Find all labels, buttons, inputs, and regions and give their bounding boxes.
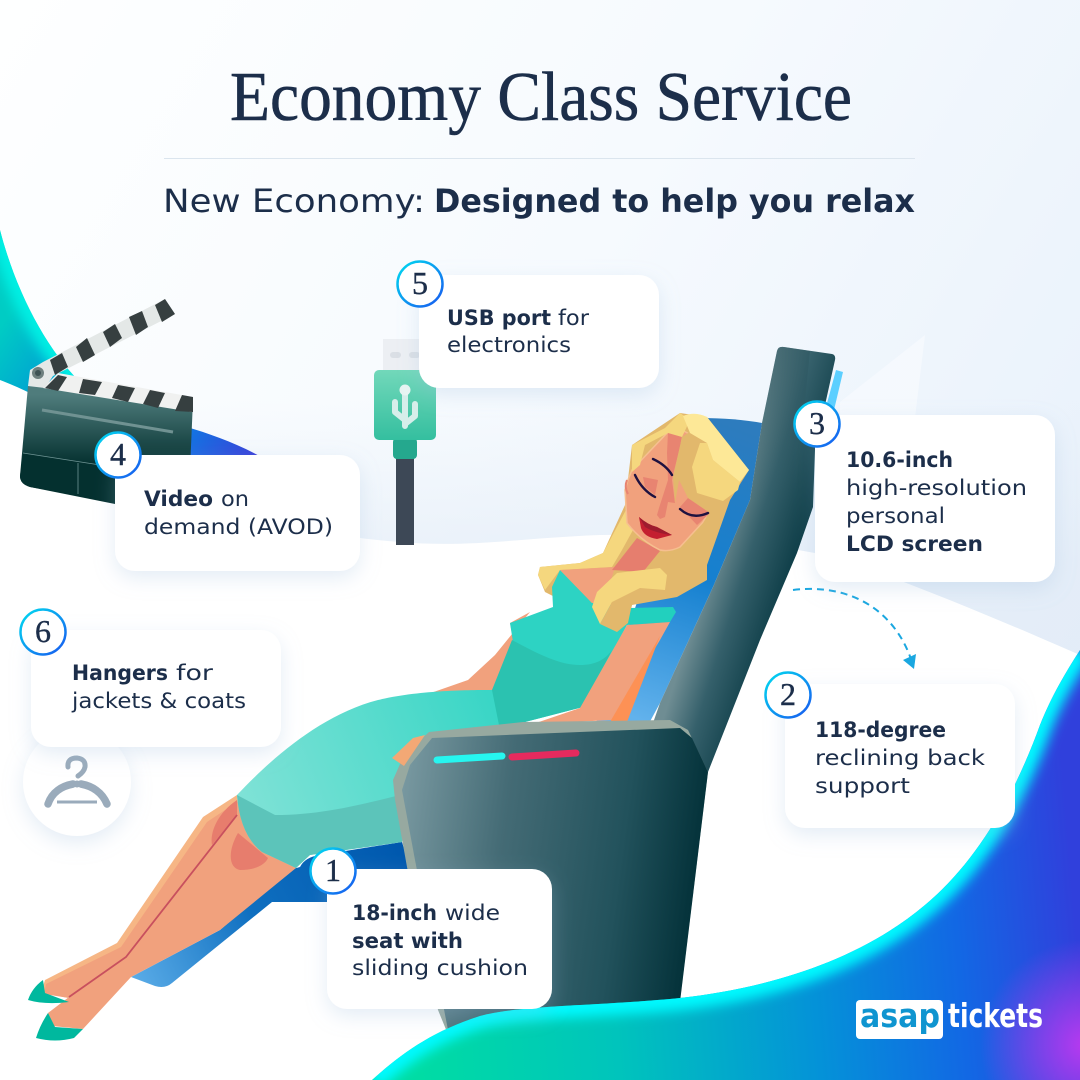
title: Economy Class Service: [230, 59, 852, 136]
woman: [28, 413, 749, 1040]
panel: USB port: for: [558, 306, 589, 330]
ear: [626, 480, 628, 494]
panel: seat width: 18-inch: [352, 901, 437, 925]
panel: video on demand: Video: [144, 487, 213, 511]
panel: video on demand: demand (AVOD): [144, 515, 333, 539]
white lower area: [0, 380, 1080, 1080]
panel: USB port: [398, 262, 659, 388]
logo: [856, 996, 1043, 1039]
seat cushion: [131, 842, 410, 987]
eyes and mouth: [635, 459, 708, 516]
legs: [28, 795, 296, 1040]
panel: video on demand: [96, 432, 360, 571]
panel: LCD screen: 3: [809, 405, 825, 441]
subtitle: [163, 182, 915, 220]
logo: asap: [860, 996, 940, 1035]
subtitle: New Economy:: [163, 182, 425, 220]
panel: LCD screen: high-resolution: [846, 476, 1027, 500]
divider: [164, 158, 915, 159]
face: [625, 430, 715, 551]
chest: [560, 567, 615, 603]
panel: seat width: wide: [445, 901, 500, 925]
icon: clapperboard: [20, 299, 193, 505]
icon: USB cable: [374, 339, 436, 545]
panel: reclining back: support: [815, 774, 910, 798]
panel: hangers: for: [176, 661, 213, 685]
seat back: [590, 347, 843, 772]
panel: reclining back: [766, 672, 1015, 828]
bottom right gradient wave: [372, 650, 1080, 1080]
panel: reclining back: 2: [780, 676, 796, 712]
panel: seat width: 1: [325, 852, 341, 888]
logo: tickets: [948, 996, 1043, 1035]
panel: video on demand: on: [221, 487, 249, 511]
dashed arrow: [793, 589, 916, 669]
panel: USB port: 5: [412, 265, 428, 301]
panel: video on demand: 4: [110, 436, 126, 472]
panel: USB port: USB port: [447, 306, 551, 330]
panel: seat width: sliding cushion: [352, 956, 528, 980]
panel: seat width: seat with: [352, 929, 463, 953]
panel: hangers: 6: [35, 613, 51, 649]
faint window reflection: [840, 335, 925, 420]
panel: LCD screen: LCD screen: [846, 532, 983, 556]
front armrest: [392, 720, 708, 1032]
hair top: [632, 413, 690, 472]
panel: reclining back: 118-degree: [815, 718, 946, 742]
front arm: [533, 622, 670, 724]
panel: hangers: [20, 610, 281, 747]
icon: hanger: [23, 728, 131, 836]
dress bodice: [492, 570, 630, 730]
panel: reclining back: reclining back: [815, 746, 986, 770]
hair over face: [673, 425, 730, 523]
panel: seat width: [310, 848, 552, 1009]
subtitle: Designed to help you relax: [434, 182, 915, 220]
panel: LCD screen: personal: [846, 504, 945, 528]
neck: [612, 538, 660, 572]
back arm: [425, 612, 530, 695]
panel: hangers: jackets & coats: [71, 689, 246, 713]
panel: LCD screen: [794, 402, 1055, 582]
background shade above white area: [0, 400, 1080, 660]
left gradient wave: [0, 230, 270, 462]
panel: LCD screen: 10.6-inch: [846, 448, 953, 472]
left hair strand: [538, 510, 633, 590]
hair front lock: [592, 568, 667, 624]
face shadows: [643, 432, 710, 525]
panel: USB port: electronics: [447, 333, 571, 357]
back hair: [538, 413, 749, 623]
dress skirt: [237, 690, 520, 868]
panel: hangers: Hangers: [72, 661, 168, 685]
